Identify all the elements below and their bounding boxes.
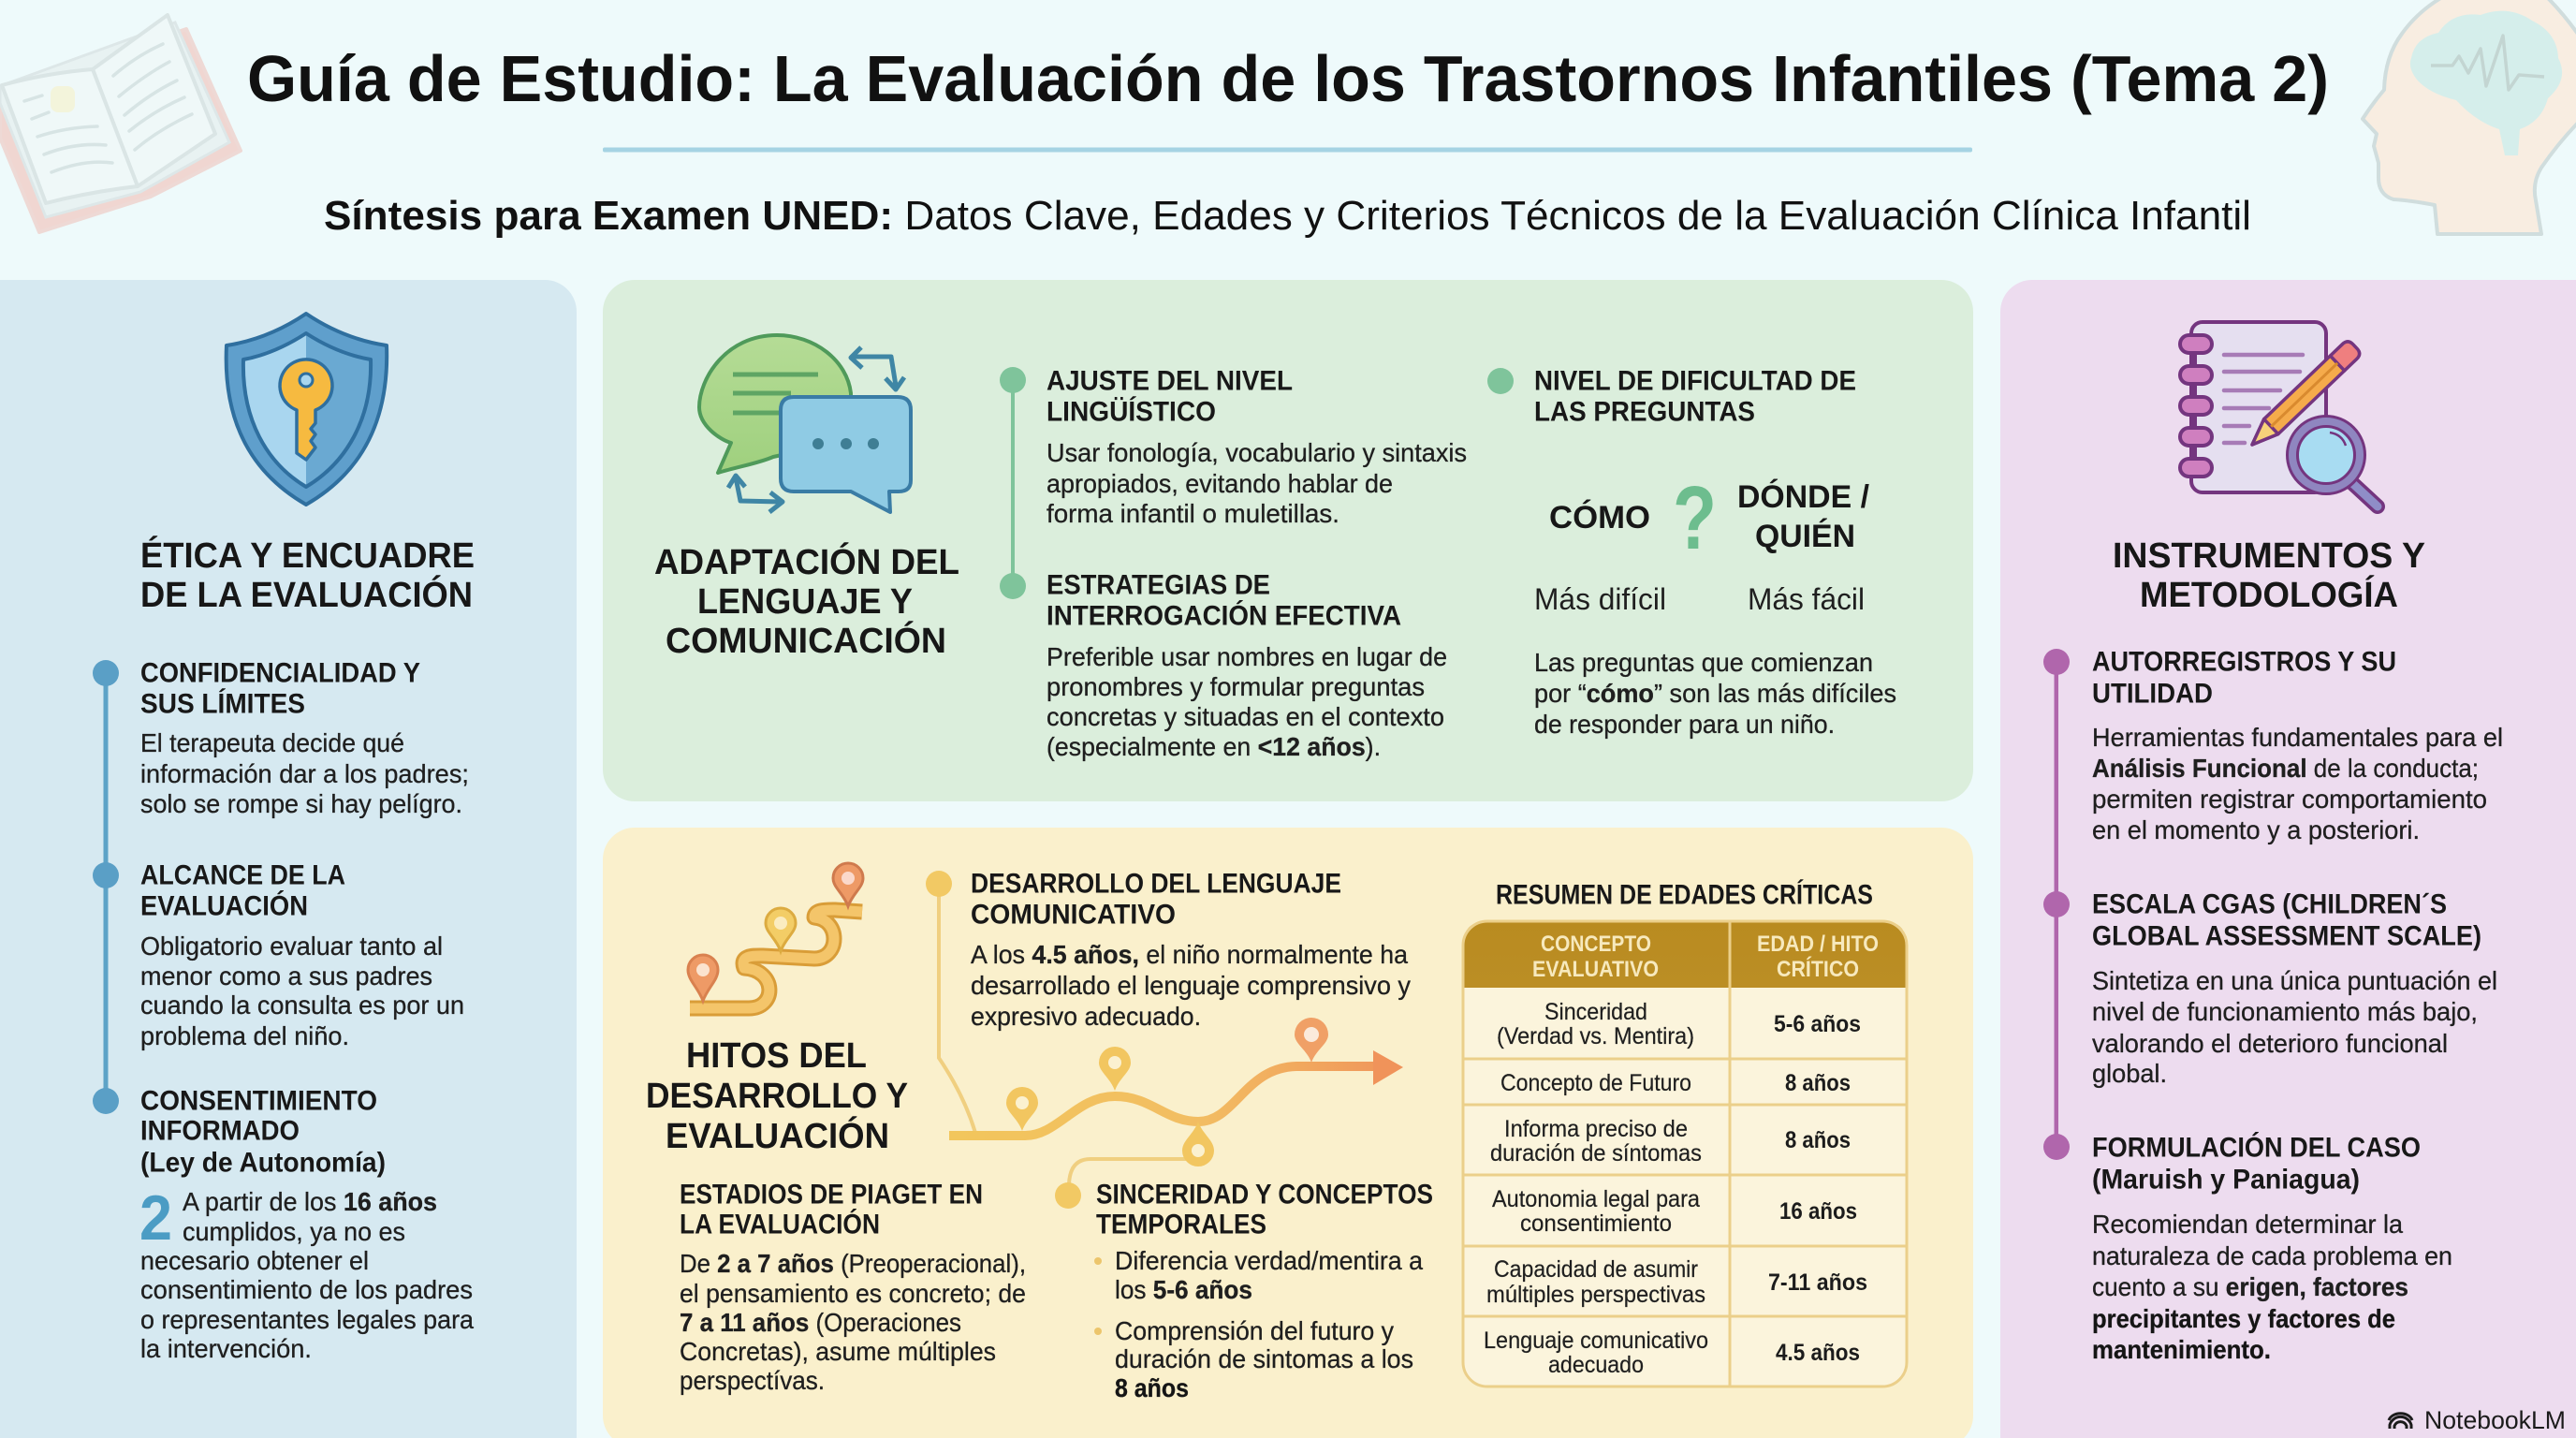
text block: estadios de piaget: De 2 a 7 años (Preoperacional), [680,1249,1026,1278]
text block: escala cgas: global. [2092,1059,2167,1088]
panel: ética y encuadre [0,280,577,1438]
text block: autorregistros: AUTORREGISTROS Y SU [2092,646,2396,678]
text block: escala cgas: ESCALA CGAS (CHILDREN´S [2092,889,2447,919]
text block: alcance: Obligatorio evaluar tanto al [140,932,443,961]
text block: nivel de dificultad: LAS PREGUNTAS [1534,397,1755,427]
text block: ajuste lingüístico: LINGÜÍSTICO [1046,395,1216,427]
table rows: 5-6 años [1774,1011,1861,1037]
text block: autorregistros [2092,646,2503,844]
text block: autorregistros: Herramientas fundamentales para el [2092,723,2503,752]
table rows [1484,999,1867,1378]
text block: consentimiento [139,1086,474,1363]
text block: escala cgas: valorando el deterioro funcional [2092,1029,2448,1058]
icon: head with brain [2363,0,2576,234]
text block: sinceridad y conceptos: Diferencia verdad/mentira a [1115,1246,1423,1275]
text block: estadios de piaget: perspectívas. [680,1366,825,1395]
icon: open book [0,15,241,232]
text block: estrategias: ESTRATEGIAS DE [1046,569,1270,601]
table header row: EDAD / HITO [1757,932,1879,957]
text block: confidencialidad: solo se rompe si hay pelígro. [140,789,462,818]
text block: nivel de dificultad: de responder para un niño. [1534,710,1835,739]
text block: alcance [140,859,464,1050]
timeline: adaptación [1000,367,1026,599]
icon: winding road with pins [688,863,863,1008]
title: Guía de Estudio: La Evaluación de los Trastornos Infantiles (Tema 2) [247,42,2329,115]
text block: ajuste lingüístico: Usar fonología, vocabulario y sintaxis [1046,438,1467,467]
text block: nivel de dificultad: NIVEL DE DIFICULTAD DE [1534,365,1856,397]
timeline: ética [93,660,119,1114]
text block: nivel de dificultad [1487,365,1896,739]
text block: ajuste lingüístico: forma infantil o muletillas. [1046,499,1339,528]
text block: estrategias: concretas y situadas en el contexto [1046,702,1444,731]
text block: nivel de dificultad: QUIÉN [1755,519,1855,554]
heading: instrumentos [2113,536,2425,615]
text block: estadios de piaget: ESTADIOS DE PIAGET EN [680,1180,983,1210]
timeline: winding path [926,871,1403,1209]
text block: autorregistros: UTILIDAD [2092,678,2213,710]
text block: estrategias: (especialmente en <12 años). [1046,732,1381,761]
text block: nivel de dificultad: Más fácil [1748,582,1865,616]
panel: hitos del desarrollo [603,828,1973,1438]
heading: ética y encuadre: ÉTICA Y ENCUADRE [140,535,475,576]
heading: adaptación: COMUNICACIÓN [666,620,946,661]
text block: estrategias: INTERROGACIÓN EFECTIVA [1046,599,1401,631]
text block: confidencialidad: El terapeuta decide qué [140,728,404,757]
text block: sinceridad y conceptos: SINCERIDAD Y CONCEPTOS [1096,1180,1433,1210]
text block: estrategias: pronombres y formular preguntas [1046,672,1425,701]
table rows: Sinceridad [1544,999,1647,1025]
text block: autorregistros: permiten registrar comportamiento [2092,785,2487,814]
text block: estadios de piaget: el pensamiento es concreto; de [680,1279,1026,1308]
text block: estrategias [1046,569,1447,761]
text block: desarrollo del lenguaje: COMUNICATIVO [971,899,1176,931]
text block: sinceridad y conceptos: Comprensión del futuro y [1115,1316,1394,1345]
text block: estadios de piaget: Concretas), asume múltiples [680,1337,996,1366]
table header row: CRÍTICO [1777,956,1859,982]
text block: nivel de dificultad: CÓMO [1549,500,1650,536]
text block: nivel de dificultad: Las preguntas que comienzan [1534,648,1873,677]
heading: adaptación: LENGUAJE Y [697,582,913,622]
table rows: consentimiento [1520,1211,1672,1237]
table rows: 8 años [1785,1127,1851,1153]
heading: adaptación [654,541,959,661]
text block: nivel de dificultad: ? [1673,468,1717,568]
heading: instrumentos: INSTRUMENTOS Y [2113,536,2425,576]
icon: notebook, pencil and magnifier [2180,322,2378,506]
text block: consentimiento: CONSENTIMIENTO [140,1086,377,1116]
text block: desarrollo del lenguaje [971,869,1411,1031]
heading: hitos: HITOS DEL [686,1036,867,1076]
text block: formulación del caso [2092,1131,2452,1364]
text block: desarrollo del lenguaje: DESARROLLO DEL LENGUAJE [971,869,1341,899]
text block: alcance: menor como a sus padres [140,961,432,990]
panel: instrumentos y metodología [2000,280,2576,1438]
text block: confidencialidad: información dar a los padres; [140,759,469,788]
text block: nivel de dificultad: por “cómo” son las más difíciles [1534,679,1896,708]
text block: sinceridad y conceptos [1094,1180,1433,1402]
table rows: Concepto de Futuro [1500,1070,1691,1096]
icon: speech bubbles [699,335,911,512]
text block: sinceridad y conceptos: 8 años [1115,1373,1189,1402]
table title: RESUMEN DE EDADES CRÍTICAS [1496,878,1873,910]
text block: desarrollo del lenguaje: desarrollado el lenguaje comprensivo y [971,971,1411,1000]
text block: estadios de piaget: LA EVALUACIÓN [680,1208,880,1240]
text block: formulación del caso: naturaleza de cada problema en [2092,1241,2452,1270]
table rows: Lenguaje comunicativo [1484,1328,1708,1354]
text block: sinceridad y conceptos: TEMPORALES [1096,1210,1266,1240]
text block: sinceridad y conceptos: duración de sintomas a los [1115,1344,1413,1373]
text block: desarrollo del lenguaje: A los 4.5 años, el niño normalmente ha [971,940,1408,969]
text block: escala cgas: nivel de funcionamiento más bajo, [2092,997,2478,1026]
table rows: (Verdad vs. Mentira) [1497,1023,1694,1049]
table: edades críticas [1463,921,1907,1387]
table header row [1532,932,1879,982]
text block: autorregistros: en el momento y a posteriori. [2092,815,2420,844]
table header row: CONCEPTO [1541,932,1651,957]
text block: confidencialidad: CONFIDENCIALIDAD Y [140,657,420,689]
text block: consentimiento: o representantes legales para [140,1305,474,1334]
heading: adaptación: ADAPTACIÓN DEL [654,541,959,582]
logo: NotebookLM: NotebookLM [2424,1406,2566,1434]
text block: consentimiento: cumplidos, ya no es [183,1217,405,1246]
table header row: EVALUATIVO [1532,957,1659,982]
text block: desarrollo del lenguaje: expresivo adecuado. [971,1002,1201,1031]
panel: adaptación del lenguaje [603,280,1973,801]
text block: ajuste lingüístico: AJUSTE DEL NIVEL [1046,365,1293,397]
subtitle: Síntesis para Examen UNED: Datos Clave, Edades y Criterios Técnicos de la Evaluación Clínica Infantil [324,193,2251,239]
heading: ética y encuadre [140,535,475,615]
text block: alcance: EVALUACIÓN [140,889,308,921]
table rows: 4.5 años [1776,1340,1860,1366]
text block: ajuste lingüístico [1046,365,1467,528]
text block: formulación del caso: Recomiendan determinar la [2092,1210,2403,1239]
text block: nivel de dificultad: DÓNDE / [1737,479,1870,515]
text block: escala cgas: GLOBAL ASSESSMENT SCALE) [2092,921,2481,951]
text block: consentimiento: necesario obtener el [140,1246,369,1275]
text block: nivel de dificultad: Más difícil [1534,582,1666,616]
text block: estrategias: Preferible usar nombres en lugar de [1046,642,1447,671]
table rows: duración de síntomas [1490,1140,1702,1167]
text block: alcance: cuando la consulta es por un [140,990,464,1020]
text block: estadios de piaget [680,1180,1026,1395]
text block: consentimiento: (Ley de Autonomía) [140,1148,386,1178]
text block: escala cgas [2092,889,2497,1088]
timeline: instrumentos [2043,649,2070,1160]
text block: alcance: ALCANCE DE LA [140,859,345,891]
text block: consentimiento: 2 [139,1182,172,1254]
text block: confidencialidad: SUS LÍMITES [140,687,305,719]
table rows: Capacidad de asumir [1494,1256,1698,1283]
text block: consentimiento: INFORMADO [140,1116,300,1146]
icon: shield with key [227,314,387,505]
text block: alcance: problema del niño. [140,1021,349,1050]
heading: hitos: EVALUACIÓN [666,1115,889,1156]
table rows: Informa preciso de [1504,1116,1688,1142]
text block: formulación del caso: cuento a su erigen, factores [2092,1272,2408,1301]
text block: sinceridad y conceptos: los 5-6 años [1115,1275,1252,1304]
table rows: 7-11 años [1768,1269,1867,1296]
text block: consentimiento: A partir de los 16 años [183,1187,437,1216]
text block: ajuste lingüístico: apropiados, evitando hablar de [1046,469,1393,498]
table rows: adecuado [1548,1352,1644,1378]
heading: ética y encuadre: DE LA EVALUACIÓN [140,574,473,615]
text block: formulación del caso: mantenimiento. [2092,1335,2271,1364]
text block: autorregistros: Análisis Funcional de la conducta; [2092,754,2479,783]
text block: escala cgas: Sintetiza en una única puntuación el [2092,966,2497,995]
table rows: múltiples perspectivas [1486,1282,1705,1308]
text block: confidencialidad [140,657,469,818]
table rows: 8 años [1785,1070,1851,1096]
text block: consentimiento: consentimiento de los padres [140,1275,473,1304]
text block: formulación del caso: FORMULACIÓN DEL CASO [2092,1131,2421,1163]
text block: formulación del caso: precipitantes y factores de [2092,1304,2395,1333]
text block: formulación del caso: (Maruish y Paniagua) [2092,1165,2360,1195]
heading: instrumentos: METODOLOGÍA [2140,574,2398,615]
heading: hitos [646,1036,908,1156]
heading: hitos: DESARROLLO Y [646,1077,908,1116]
table rows: Autonomia legal para [1492,1186,1700,1212]
table rows: 16 años [1779,1198,1857,1225]
text block: estadios de piaget: 7 a 11 años (Operaciones [680,1308,961,1337]
text block: consentimiento: la intervención. [140,1334,312,1363]
